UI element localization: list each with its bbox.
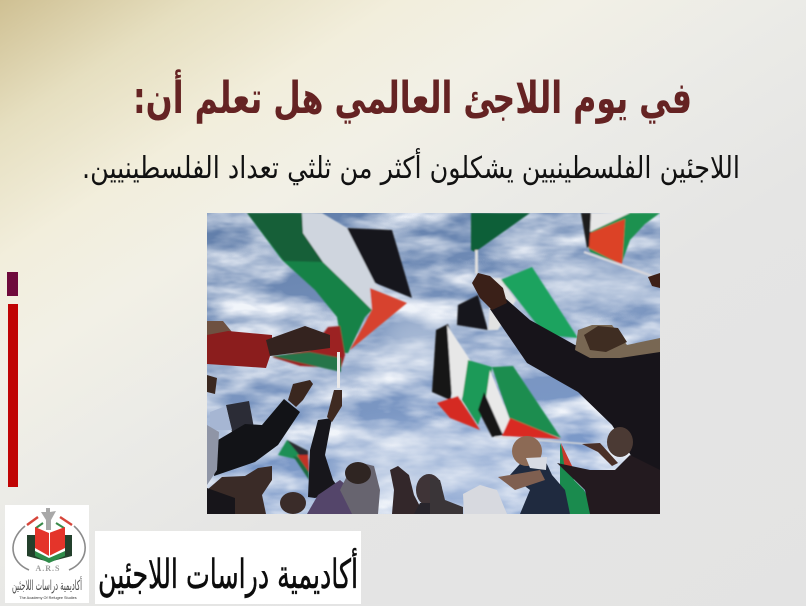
raised hand	[288, 380, 313, 407]
right woman head	[607, 427, 633, 457]
headscarf	[575, 325, 660, 358]
small distant flag	[278, 440, 309, 480]
bottom left people	[207, 466, 272, 514]
woman face	[345, 462, 371, 484]
calligraphic name: أكاديمية دراسات اللاجئين	[98, 548, 358, 598]
book dark sides and green base	[27, 535, 72, 562]
clapping hands	[390, 466, 419, 514]
woman right of hands	[416, 474, 442, 506]
large flag	[247, 213, 412, 372]
hand	[266, 326, 330, 356]
child	[510, 455, 570, 514]
woman grey scarf	[340, 463, 380, 514]
arcs around book	[13, 517, 85, 570]
far right hand	[648, 273, 660, 288]
logo: Academy of Refugee Studies emblem: أكاديمية دراسات اللاجئين	[12, 576, 82, 594]
middle flag	[457, 267, 578, 338]
red sleeve	[207, 331, 272, 368]
small child head	[280, 492, 306, 514]
raised black sleeve	[214, 399, 300, 476]
dark scarf woman	[430, 478, 463, 514]
hand	[472, 273, 507, 310]
woman purple garment	[307, 480, 352, 514]
white scarf woman	[463, 485, 507, 514]
crowd lower left	[207, 375, 445, 514]
right woman body	[557, 455, 660, 514]
logo: Arabic calligraphy banner	[95, 531, 361, 604]
photo: Palestinian flags against the sky	[207, 213, 660, 514]
red accent bar	[8, 304, 18, 487]
clouds	[207, 213, 660, 514]
bottom left dark bodies	[207, 488, 235, 514]
red open book	[35, 527, 65, 556]
dark square flag	[226, 401, 254, 432]
raised arm and torso	[490, 298, 660, 480]
accent bars	[7, 272, 18, 487]
woman arm	[582, 443, 618, 466]
English name: The Academy Of Refugee Studies	[19, 596, 77, 600]
far left figure	[207, 425, 219, 485]
A.R.S lettering: A.R.S	[35, 564, 61, 573]
logo: Academy of Refugee Studies emblem	[5, 505, 89, 603]
crowd lower right	[430, 427, 660, 514]
top right flag	[581, 213, 660, 277]
shoulder	[207, 321, 232, 335]
figure above book	[41, 508, 56, 530]
top centre flag	[471, 213, 530, 274]
flag behind child	[560, 443, 590, 514]
lower right flag	[432, 324, 600, 445]
left figure with red sleeve	[207, 321, 330, 368]
maroon accent bar	[7, 272, 18, 296]
flag pole: large flag	[337, 352, 340, 388]
right figure raising arm	[472, 273, 660, 480]
face	[584, 326, 627, 352]
raised arm woman	[308, 418, 336, 498]
